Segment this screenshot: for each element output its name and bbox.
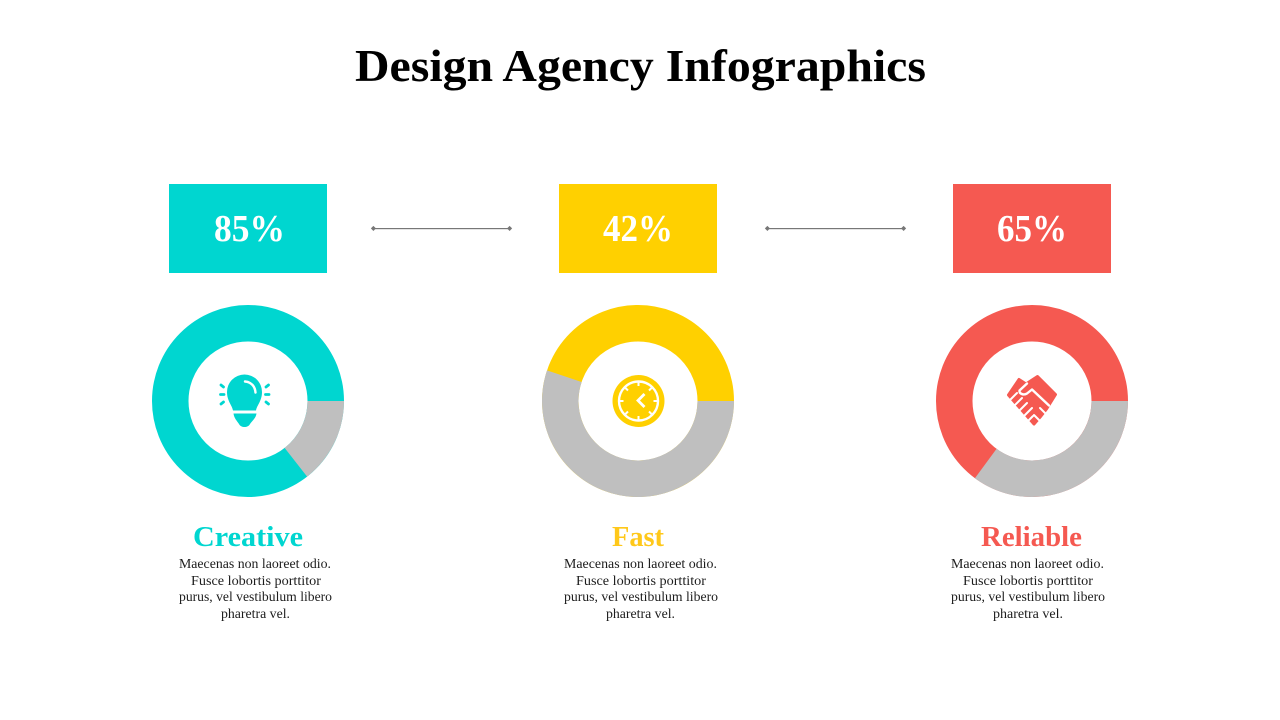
title: Design Agency Infographics	[355, 40, 926, 91]
description: reliable: Fusce lobortis porttitor	[963, 574, 1093, 589]
description: creative: Fusce lobortis porttitor	[191, 574, 321, 589]
description: reliable	[951, 557, 1105, 622]
heading: Reliable: Reliable	[981, 521, 1082, 553]
percentage box: 85%: 85%	[214, 208, 285, 250]
donut chart: 42%	[542, 323, 734, 497]
percentage box: 42%: 42%	[603, 208, 673, 250]
panel: creative	[169, 184, 344, 622]
description: fast: Maecenas non laoreet odio.	[564, 557, 717, 572]
heading: Fast: Fast	[612, 521, 664, 553]
connector: creative to fast	[371, 226, 512, 231]
connector: fast to reliable	[765, 226, 906, 231]
icon: clock	[612, 375, 664, 427]
description: creative: Maecenas non laoreet odio.	[179, 557, 331, 572]
description: fast	[564, 557, 718, 622]
description: fast: purus, vel vestibulum libero	[564, 590, 718, 605]
percentage box: 65%	[953, 184, 1111, 273]
heading: Creative: Creative	[193, 521, 303, 553]
panel: reliable	[951, 184, 1128, 622]
description: creative: pharetra vel.	[221, 607, 290, 622]
description: reliable: purus, vel vestibulum libero	[951, 590, 1105, 605]
description: reliable: Maecenas non laoreet odio.	[951, 557, 1104, 572]
description: creative: purus, vel vestibulum libero	[179, 590, 332, 605]
percentage box: 65%: 65%	[997, 208, 1067, 250]
description: fast: pharetra vel.	[606, 607, 675, 622]
donut chart: 65%	[954, 323, 1128, 497]
percentage box: 85%	[169, 184, 327, 273]
percentage box: 42%	[559, 184, 717, 273]
description: reliable: pharetra vel.	[993, 607, 1063, 622]
icon: handshake	[1007, 376, 1056, 424]
description: creative	[179, 557, 332, 622]
panel: fast	[542, 184, 734, 622]
donut chart: 85%	[170, 323, 344, 479]
description: fast: Fusce lobortis porttitor	[576, 574, 706, 589]
icon: light bulb	[220, 374, 269, 427]
